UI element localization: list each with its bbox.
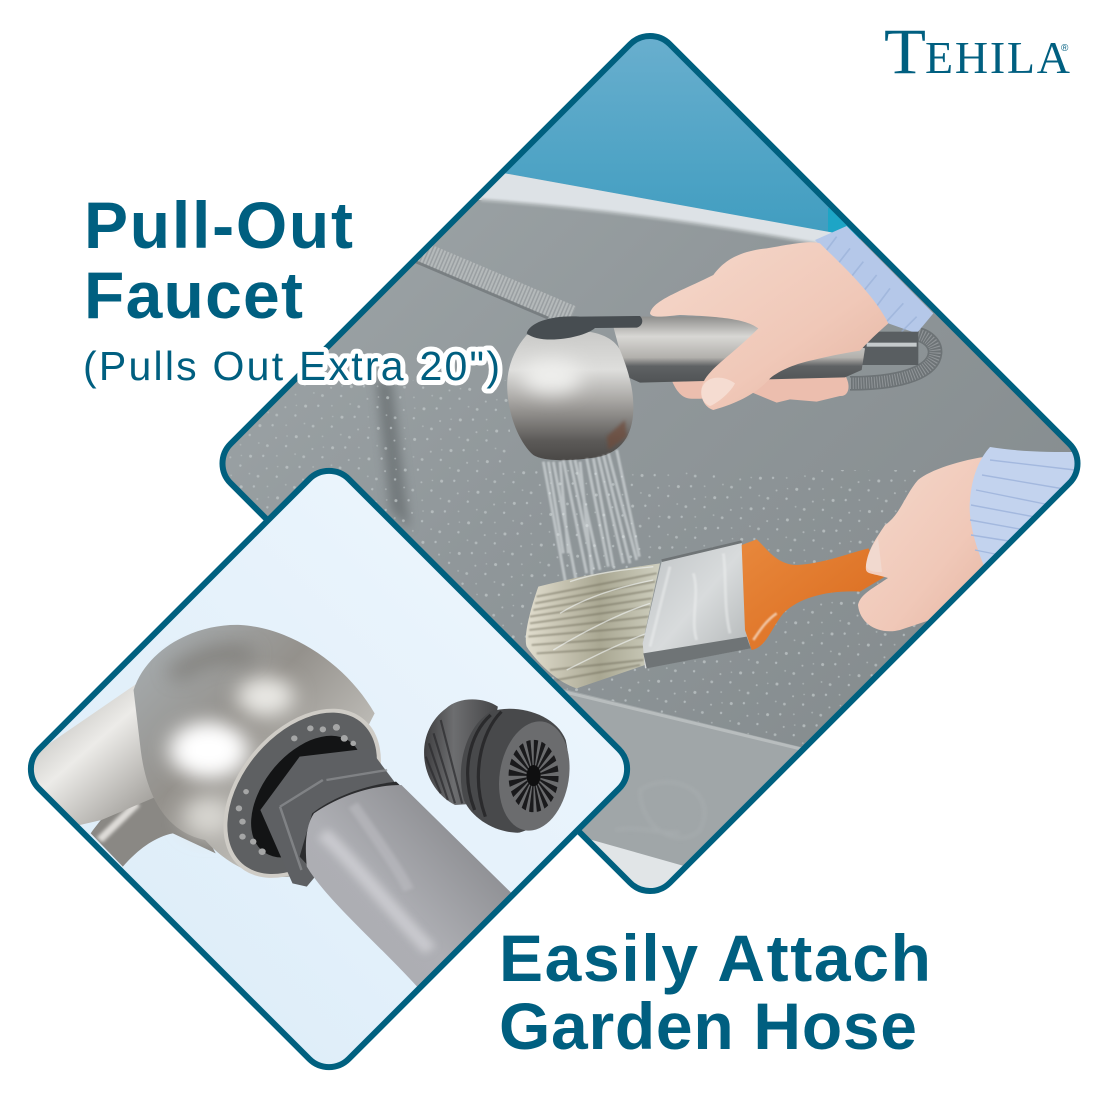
ball dark band	[173, 654, 251, 677]
bottom rim	[591, 840, 683, 888]
ferrule wet sheen	[650, 553, 730, 647]
blue wall	[505, 39, 830, 232]
heading: Pull-Out Faucet: Pull-Out	[84, 188, 353, 262]
aerator rear thread	[424, 699, 498, 805]
spray button	[527, 316, 642, 339]
rim lower shade	[481, 200, 817, 244]
thumbnail	[701, 378, 735, 406]
handle sheen	[753, 613, 777, 640]
aerator centre	[526, 765, 541, 786]
ball top light	[237, 677, 294, 717]
ferrule	[643, 542, 750, 668]
grey hose	[306, 785, 573, 1067]
hand top	[650, 242, 888, 410]
hose loop braid	[850, 333, 935, 383]
heading: Easily Attach Garden Hose: Garden Hose	[499, 989, 917, 1063]
ball lower light	[184, 797, 234, 837]
small diamond border	[19, 459, 639, 1079]
small diamond base	[19, 459, 639, 1079]
hex nut	[260, 748, 394, 887]
ledge water ripples	[615, 782, 705, 838]
logo: Tehila	[884, 16, 1070, 88]
sleeve ribs lower	[970, 460, 1075, 555]
hose lower edge	[414, 261, 548, 318]
heading: Easily Attach Garden Hose	[499, 921, 931, 1063]
aerator front body	[461, 709, 568, 833]
heading: Easily Attach Garden Hose: Easily Attach	[499, 921, 931, 995]
aerator ridges	[468, 712, 501, 817]
collar dark	[300, 782, 405, 870]
brush bristles	[526, 563, 660, 688]
hose collar	[857, 332, 918, 365]
spray head	[507, 331, 633, 460]
hand and sprayer	[507, 226, 935, 688]
ball head	[134, 625, 375, 877]
aerator face	[492, 717, 577, 835]
sink lower ledge	[563, 689, 801, 866]
hose highlight top	[353, 805, 409, 890]
subheading: pulls out extra 20 inches: (Pulls Out Extra 20")	[83, 343, 500, 389]
ledge shade	[565, 692, 805, 750]
head inner ring	[197, 687, 408, 900]
collar highlight	[867, 343, 917, 347]
spray head handle	[613, 317, 865, 383]
lower pipe highlight	[100, 803, 137, 840]
logo: Tehila: T	[884, 16, 926, 88]
right wall accent	[828, 208, 860, 240]
water over bristles	[553, 567, 653, 670]
spray holes	[236, 724, 356, 855]
hose loop	[850, 333, 935, 383]
sleeve ribs	[827, 237, 917, 332]
water stream lines	[542, 449, 641, 580]
head highlight	[522, 360, 582, 393]
panel: garden hose attachment diamond	[16, 459, 639, 1079]
faucet hose upper	[410, 247, 572, 316]
sink rim	[470, 173, 835, 246]
head inner dark	[228, 717, 385, 877]
ball highlight	[169, 722, 248, 778]
heading: Pull-Out Faucet: Faucet	[84, 258, 303, 332]
lower pipe	[91, 780, 216, 867]
droplets	[230, 380, 916, 744]
hose highlight	[323, 833, 430, 950]
heading: Pull-Out Faucet	[84, 188, 353, 332]
logo: Tehila: ®	[1061, 43, 1069, 54]
head warm reflection	[607, 420, 627, 450]
head outer ring	[191, 681, 413, 905]
ferrule top edge	[662, 542, 742, 561]
brush handle	[742, 539, 885, 650]
aerator slots	[517, 753, 550, 799]
ferrule lower shadow	[643, 637, 751, 668]
sleeve lower hand	[970, 447, 1090, 568]
big diamond border	[211, 24, 1089, 903]
bristle strands	[528, 573, 657, 680]
rear thread lines	[426, 720, 462, 803]
nut facets	[280, 770, 387, 870]
hose braid	[410, 247, 572, 316]
panel: pull-out faucet photo diamond	[200, 20, 1100, 905]
sink corner shadow	[376, 380, 410, 530]
logo: Tehila: EHILA	[925, 32, 1070, 83]
lower hand	[858, 456, 1000, 631]
sleeve upper	[815, 226, 933, 333]
arm pipe	[16, 683, 180, 827]
sink basin	[226, 174, 1072, 747]
lower thumbnail	[866, 538, 882, 572]
fingers behind	[672, 375, 849, 403]
